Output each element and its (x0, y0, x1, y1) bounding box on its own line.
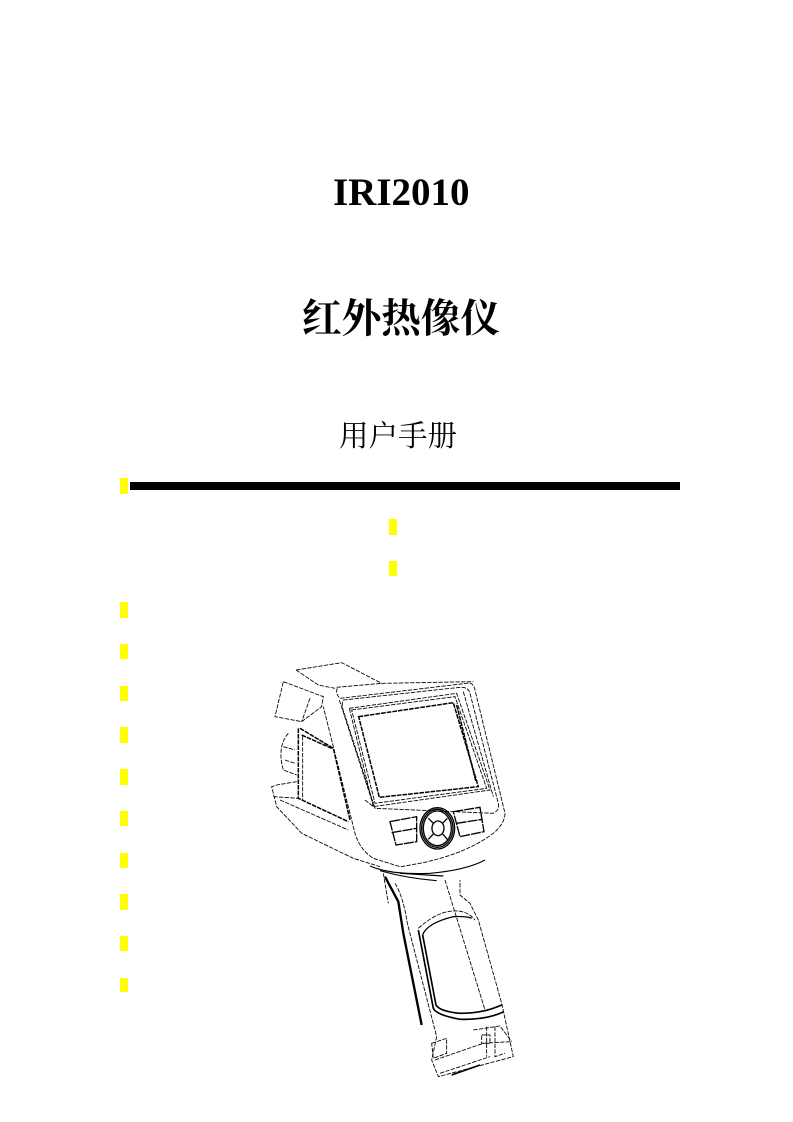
heading: product name: 红外热像仪 (302, 297, 500, 341)
title: model number: IRI2010 (333, 171, 470, 214)
subheading: user manual: 用户手册 (339, 421, 457, 453)
navigation ring (420, 808, 455, 849)
yellow markers (120, 478, 397, 992)
divider bar (130, 482, 680, 490)
soft keys (390, 807, 484, 845)
device head (272, 663, 505, 867)
device grip (370, 860, 513, 1077)
